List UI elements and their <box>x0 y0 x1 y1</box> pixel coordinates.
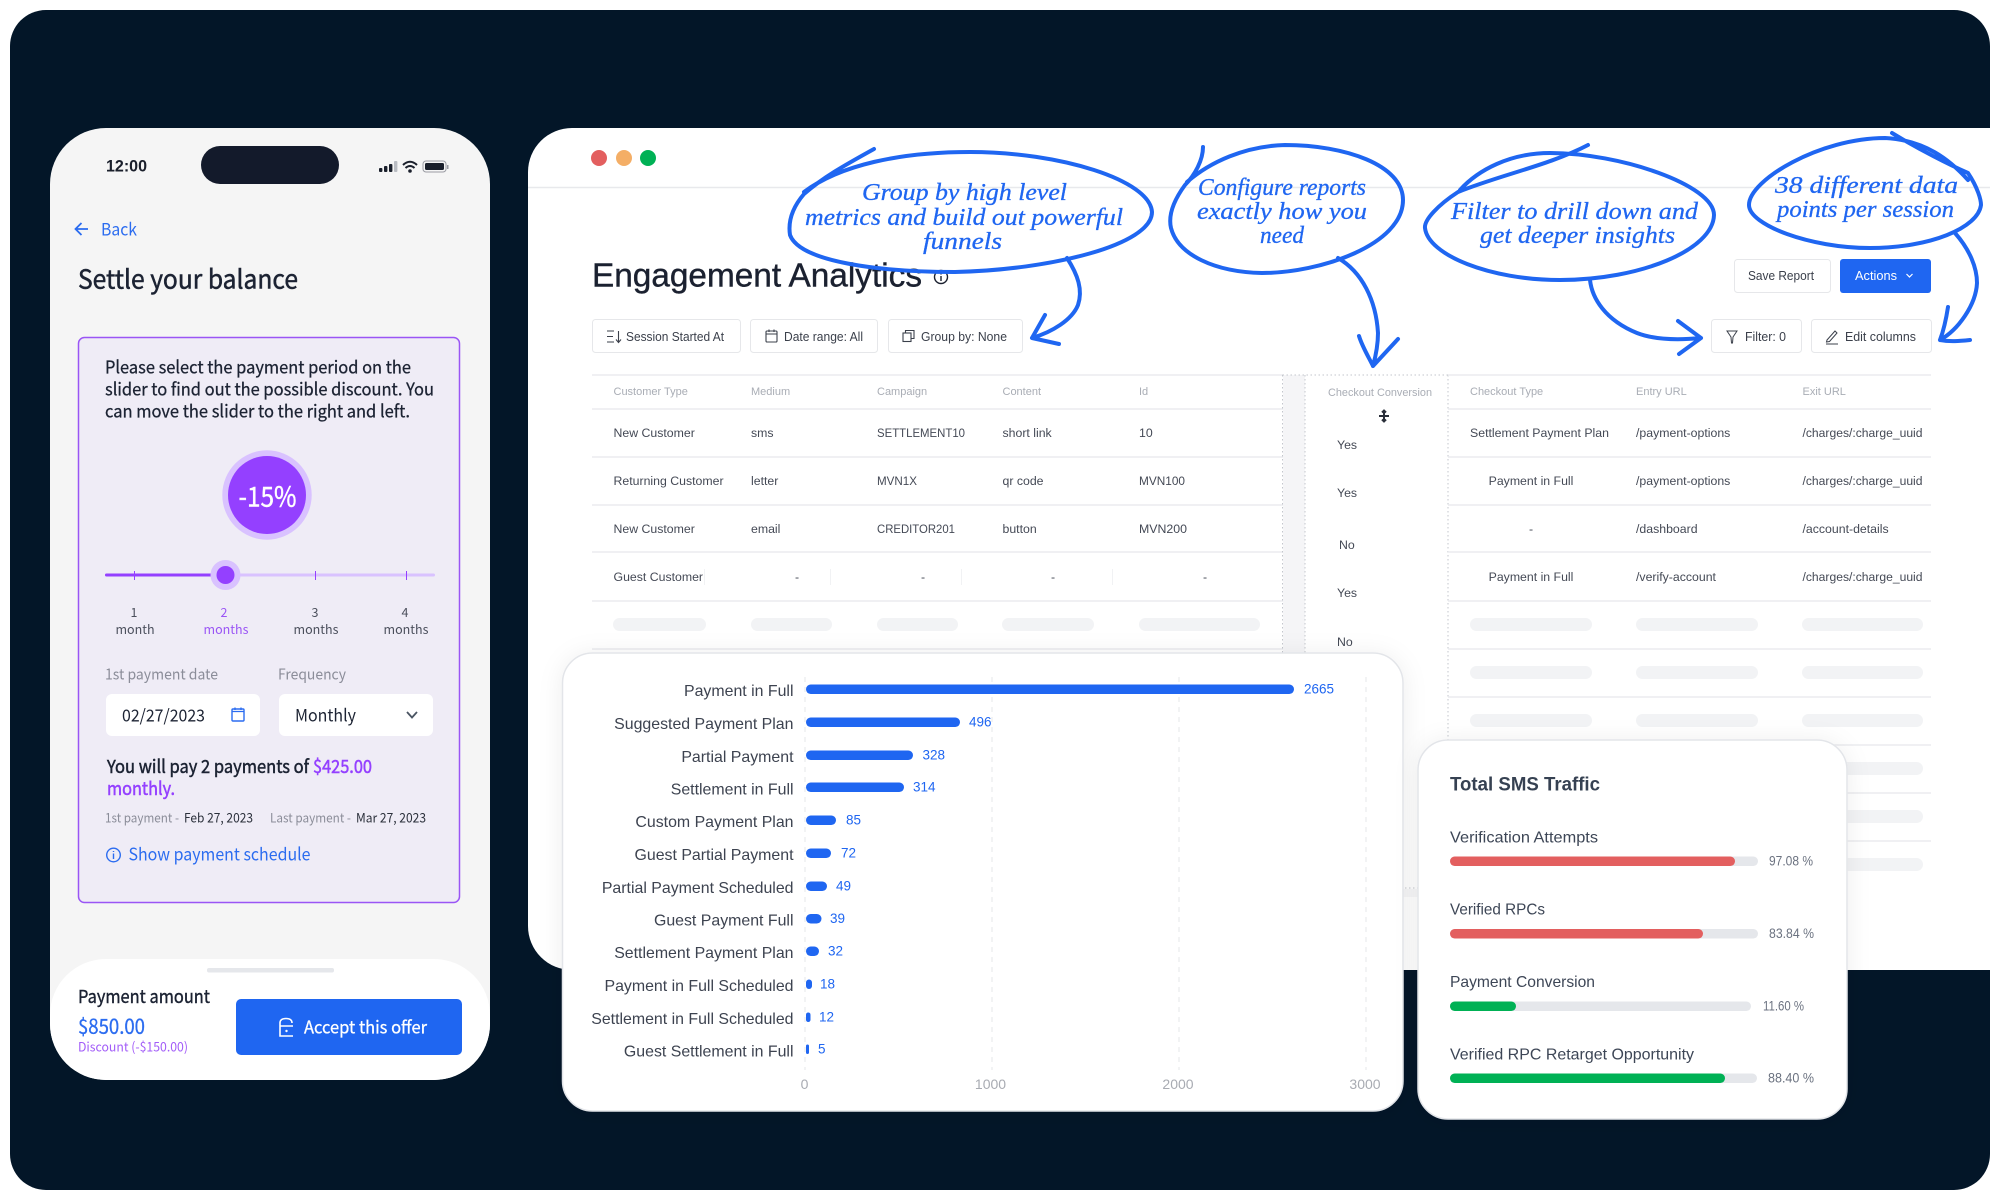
panel: total sms traffic card <box>1418 740 1847 1119</box>
show payment schedule link: Show payment schedule <box>128 842 310 866</box>
right table rows: /charges/:charge_uuid <box>1802 474 1923 488</box>
payment amount: Discount (-$150.00) <box>78 1036 188 1056</box>
chart category labels: Payment in Full Scheduled <box>604 978 794 995</box>
table: left columns <box>592 375 1283 649</box>
right table rows: /payment-options <box>1636 426 1730 440</box>
slider labels: months <box>294 619 339 638</box>
callout: group by: Group by high level <box>862 180 1067 206</box>
first payment date field <box>105 664 260 736</box>
chart category labels <box>591 683 794 1060</box>
left table rows: Returning Customer <box>614 474 724 488</box>
instructions text: can move the slider to the right and left. <box>105 398 410 424</box>
phone status bar <box>106 146 448 184</box>
left table rows: New Customer <box>614 426 695 440</box>
panel: horizontal bar chart card <box>562 653 1403 1111</box>
frequency field: Frequency <box>278 664 346 684</box>
payment amount: Payment amount <box>78 983 210 1009</box>
right table rows: /dashboard <box>1636 522 1698 536</box>
arrow: data points to edit columns <box>1940 233 1977 341</box>
bottom sheet <box>50 959 490 1080</box>
callout: group by <box>790 149 1152 272</box>
slider labels: months <box>204 619 249 638</box>
panel: mobile phone payment screen <box>50 128 490 1080</box>
left skeleton row <box>613 618 1260 631</box>
chart value labels: 328 <box>922 748 945 762</box>
right column headers: Exit URL <box>1802 386 1846 398</box>
left table rows: MVN1X <box>877 474 917 488</box>
callout: data points: 38 different data <box>1774 173 1958 199</box>
left table rows: - <box>1203 570 1207 584</box>
right table rows <box>1470 426 1923 584</box>
left table rows: sms <box>751 426 774 440</box>
chart category labels: Suggested Payment Plan <box>614 716 794 733</box>
chart value labels <box>818 682 1334 1056</box>
instructions text: slider to find out the possible discount. You <box>105 376 434 402</box>
left column headers: Customer Type <box>614 386 688 398</box>
metric: verified rpcs <box>1450 902 1814 941</box>
left table rows: email <box>751 522 780 536</box>
left table rows: MVN200 <box>1139 522 1187 536</box>
left table rows: qr code <box>1002 474 1044 488</box>
slider labels: 1 <box>131 602 138 621</box>
callout: group by: metrics and build out powerful <box>805 205 1123 231</box>
payment dates: 1st payment - <box>105 808 179 826</box>
frequency field <box>278 664 433 736</box>
payment amount: $850.00 <box>78 1010 145 1040</box>
chart category labels: Guest Settlement in Full <box>624 1044 794 1060</box>
button: filter: Filter: 0 <box>1745 330 1786 344</box>
back link: Back <box>101 216 138 240</box>
conversion values: No <box>1337 635 1353 649</box>
right column headers <box>1470 386 1846 398</box>
left table rows: - <box>795 570 799 584</box>
slider labels: month <box>115 619 155 638</box>
callout: filter: Filter to drill down and <box>1450 199 1699 225</box>
metric: verification attempts: 97.08 % <box>1769 854 1813 868</box>
back link <box>76 216 138 240</box>
metric: payment conversion: 11.60 % <box>1763 998 1804 1014</box>
slider labels: months <box>384 619 429 638</box>
metric: verified rpc retarget opportunity: 88.40 % <box>1768 1070 1814 1086</box>
chart category labels: Custom Payment Plan <box>635 814 794 831</box>
toolbar: group by: Group by: None <box>921 330 1007 344</box>
button: edit columns <box>1812 320 1932 352</box>
chart value labels: 49 <box>836 878 851 894</box>
accept button: Accept this offer <box>304 1014 427 1040</box>
left column headers: Id <box>1139 386 1148 398</box>
right table rows: /verify-account <box>1636 570 1717 584</box>
button: actions: Actions <box>1855 269 1897 283</box>
chart value labels: 314 <box>913 780 936 794</box>
window controls <box>591 150 656 166</box>
left table rows: SETTLEMENT10 <box>877 426 965 440</box>
payment dates: Mar 27, 2023 <box>356 808 426 826</box>
chart x axis labels: 1000 <box>975 1076 1006 1092</box>
conversion values: Yes <box>1337 486 1357 500</box>
left table rows: New Customer <box>614 522 695 536</box>
payment summary <box>106 753 372 801</box>
toolbar: session started at: Session Started At <box>626 330 724 344</box>
payment period slider <box>105 560 435 590</box>
payment dates: Last payment - <box>270 808 351 826</box>
chart value labels: 2665 <box>1304 682 1334 696</box>
callout: filter: get deeper insights <box>1480 223 1675 249</box>
right table rows: Payment in Full <box>1489 474 1573 488</box>
callout: configure reports: Configure reports <box>1198 175 1366 201</box>
chart category labels: Partial Payment Scheduled <box>602 880 794 897</box>
left column headers: Content <box>1002 386 1041 398</box>
toolbar: date range <box>750 320 878 352</box>
left table rows: CREDITOR201 <box>877 522 955 536</box>
discount badge: -15% <box>238 476 296 514</box>
left column headers <box>614 386 1148 398</box>
slider labels: 3 <box>312 602 319 621</box>
chart value labels: 72 <box>841 846 856 860</box>
left table rows: button <box>1002 522 1037 536</box>
frequency field: Monthly <box>295 702 356 726</box>
right table rows: Payment in Full <box>1489 570 1573 584</box>
chart category labels: Guest Payment Full <box>654 912 794 930</box>
toolbar: session started at <box>592 320 740 352</box>
chart category labels: Settlement Payment Plan <box>614 945 794 962</box>
callout: configure reports <box>1170 145 1403 273</box>
metric: verification attempts <box>1450 830 1813 868</box>
left column headers: Campaign <box>877 386 927 398</box>
chart x axis labels: 3000 <box>1349 1076 1381 1092</box>
chart category labels: Settlement in Full Scheduled <box>591 1011 794 1028</box>
conversion values <box>1337 438 1357 649</box>
callout: configure reports: exactly how you <box>1197 199 1367 225</box>
metric: verified rpcs: Verified RPCs <box>1450 902 1545 918</box>
chart x axis labels: 0 <box>801 1076 809 1092</box>
left table rows: Guest Customer <box>614 570 703 584</box>
chart x axis labels: 2000 <box>1162 1076 1194 1092</box>
left table rows: - <box>921 570 925 584</box>
chart value labels: 32 <box>828 944 843 958</box>
button: save report <box>1734 260 1830 292</box>
slider labels <box>115 602 429 638</box>
button: actions <box>1840 259 1931 293</box>
first payment date field: 02/27/2023 <box>122 702 205 726</box>
metric: verification attempts: Verification Attempts <box>1450 830 1598 846</box>
discount badge <box>222 450 312 540</box>
left table rows: - <box>1051 570 1055 584</box>
payment summary: monthly. <box>107 775 175 801</box>
right table rows: /charges/:charge_uuid <box>1802 570 1923 584</box>
callout: group by: funnels <box>923 229 1002 255</box>
toolbar: date range: Date range: All <box>784 330 863 344</box>
slider labels: 2 <box>221 602 228 621</box>
table: right columns <box>1448 375 1931 871</box>
chart bars <box>806 684 1294 1054</box>
slider labels: 4 <box>402 602 409 621</box>
payment amount <box>78 983 210 1056</box>
toolbar: group by <box>888 320 1022 352</box>
right table rows: - <box>1529 522 1533 536</box>
heading: settle your balance: Settle your balance <box>78 260 298 296</box>
payment dates <box>105 808 426 826</box>
metric: verified rpc retarget opportunity <box>1450 1046 1814 1086</box>
conversion values: No <box>1339 538 1355 552</box>
conversion values: Yes <box>1337 438 1357 452</box>
conversion values: Yes <box>1337 586 1357 600</box>
phone status bar: 12:00 <box>106 156 147 176</box>
table: highlighted checkout conversion column: Checkout Conversion <box>1328 387 1432 399</box>
right table rows: /account-details <box>1802 522 1889 536</box>
metric: verified rpc retarget opportunity: Verified RPC Retarget Opportunity <box>1450 1046 1694 1064</box>
heading: engagement analytics: Engagement Analytics <box>592 258 922 294</box>
sms card title: Total SMS Traffic <box>1450 774 1600 796</box>
arrow: group by to toolbar <box>1032 258 1080 344</box>
right table rows: /payment-options <box>1636 474 1730 488</box>
first payment date field: 1st payment date <box>105 664 218 684</box>
chart value labels: 496 <box>969 714 992 730</box>
callout: data points: points per session <box>1775 197 1954 223</box>
chart value labels: 18 <box>820 976 835 992</box>
callout: data points <box>1749 133 1981 248</box>
metric: payment conversion <box>1450 974 1804 1014</box>
right skeleton rows <box>1470 618 1923 871</box>
chart category labels: Settlement in Full <box>671 782 794 798</box>
button: filter <box>1712 320 1802 352</box>
metric: payment conversion: Payment Conversion <box>1450 974 1595 991</box>
button: edit columns: Edit columns <box>1845 330 1916 344</box>
metric: verified rpcs: 83.84 % <box>1769 926 1814 941</box>
left table rows: MVN100 <box>1139 474 1185 488</box>
right column headers: Entry URL <box>1636 386 1687 398</box>
right column headers: Checkout Type <box>1470 386 1543 398</box>
chart category labels: Guest Partial Payment <box>635 847 794 864</box>
payment summary: You will pay 2 payments of <box>106 753 310 779</box>
instructions text: Please select the payment period on the <box>105 354 411 380</box>
payment summary: $425.00 <box>313 753 372 779</box>
payment dates: Feb 27, 2023 <box>184 808 253 826</box>
right table rows: Settlement Payment Plan <box>1470 426 1609 440</box>
instructions text <box>105 354 434 424</box>
chart x axis labels <box>801 1076 1381 1092</box>
left column headers: Medium <box>751 386 790 398</box>
arrow: configure reports to column <box>1338 258 1398 366</box>
chart category labels: Partial Payment <box>681 749 794 766</box>
chart value labels: 5 <box>818 1042 826 1056</box>
arrow: filter to filter button <box>1590 280 1701 354</box>
chart value labels: 12 <box>819 1010 834 1024</box>
left table rows: letter <box>751 474 778 488</box>
chart category labels: Payment in Full <box>684 683 794 700</box>
panel: slider form <box>78 338 460 902</box>
table: highlighted checkout conversion column <box>1282 375 1448 897</box>
right table rows: /charges/:charge_uuid <box>1802 426 1923 440</box>
move cursor icon <box>1379 410 1389 422</box>
left table rows: 10 <box>1139 426 1153 440</box>
chart value labels: 39 <box>830 911 845 926</box>
chart value labels: 85 <box>846 812 861 828</box>
callout: filter <box>1425 145 1714 280</box>
callout: configure reports: need <box>1260 223 1305 249</box>
button: save report: Save Report <box>1748 269 1814 283</box>
accept button <box>236 999 462 1055</box>
panel: browser window <box>528 128 2000 970</box>
left table rows <box>614 426 1207 584</box>
left table rows: short link <box>1002 426 1053 440</box>
